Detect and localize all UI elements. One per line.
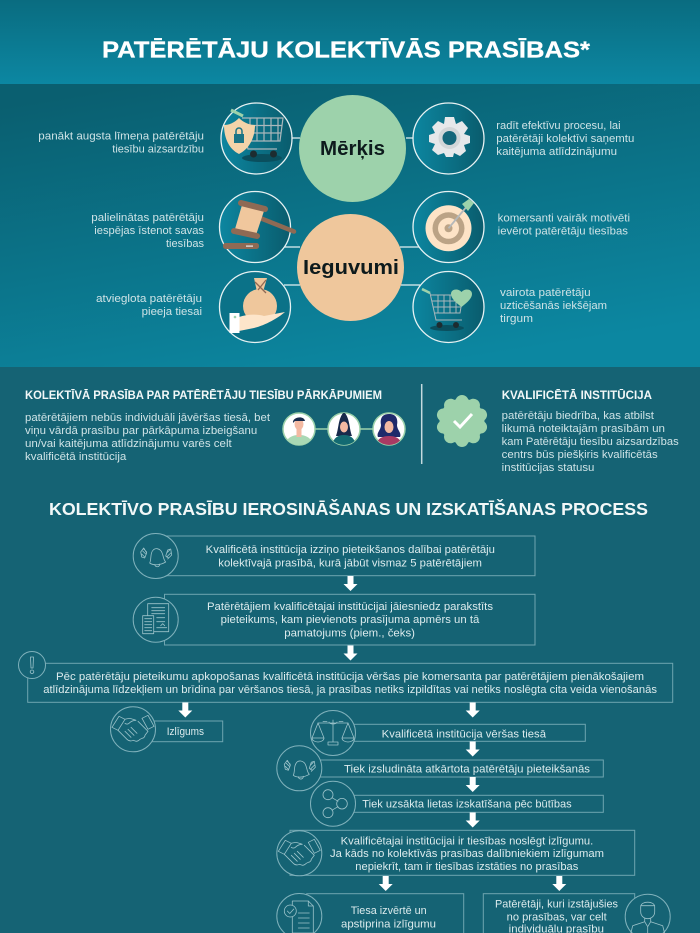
step 2: pieteikums, kam pievienots prasījuma apmērs un tā bbox=[221, 614, 480, 626]
text: benefit trust: uzticēšanās iekšējam bbox=[500, 300, 607, 312]
step: court approves: apstiprina izlīgumu bbox=[341, 918, 436, 930]
icon: cart with heart bbox=[413, 272, 484, 342]
circle: Ieguvumi: Ieguvumi bbox=[303, 256, 399, 279]
text: benefit rights: tiesības bbox=[166, 238, 204, 250]
arrow bbox=[344, 646, 358, 660]
text: left goal: panākt augsta līmeņa patērētāju bbox=[38, 130, 204, 142]
text: right goal: kaitējuma atlīdzinājumu bbox=[496, 146, 617, 158]
heading: KVALIFICĒTĀ INSTITŪCIJA bbox=[502, 389, 653, 402]
step: individual claim: no prasības, var celt bbox=[507, 911, 607, 923]
step: merits: Tiek uzsākta lietas izskatīšana pēc būtības bbox=[362, 799, 572, 811]
circle: Mērķis bbox=[299, 95, 406, 202]
title: PATĒRĒTĀJU KOLEKTĪVĀS PRASĪBAS* bbox=[102, 36, 590, 62]
arrow bbox=[466, 702, 480, 718]
step: repeat application bbox=[277, 746, 603, 791]
arrow bbox=[466, 742, 480, 756]
circle: Mērķis: Mērķis bbox=[320, 137, 385, 160]
step: court approves: Tiesa izvērtē un bbox=[351, 905, 427, 917]
panel: collective claim bbox=[25, 389, 405, 463]
step: settlement: Izlīgums bbox=[167, 726, 204, 738]
step 3: Pēc patērētāju pieteikumu apkopošanas kvalificētā institūcija vēršas pie komersanta par patērētājiem pienākošajiem bbox=[56, 671, 644, 683]
step 3: atlīdzinājuma līdzekļiem un brīdina par vēršanos tiesā, ja prasības netiks izpildītas vai netiks noslēgta cita veida vienošanās bbox=[43, 684, 658, 696]
description: centrs būs piešķiris kvalificētās bbox=[502, 449, 658, 461]
step 1 bbox=[133, 534, 535, 578]
step: settlement right: Kvalificētajai institūcijai ir tiesības noslēgt izlīgumu. bbox=[341, 835, 593, 847]
arrow bbox=[178, 702, 192, 718]
description: kam Patērētāju tiesību aizsardzības bbox=[502, 436, 679, 448]
step: settlement right: nepiekrīt, tam ir tiesības izstāties no prasības bbox=[355, 861, 579, 873]
arrow bbox=[379, 876, 393, 891]
icon: target bbox=[413, 192, 484, 262]
step 2: Patērētājiem kvalificētajai institūcijai jāiesniedz parakstīts bbox=[207, 601, 494, 613]
text: benefit rights: iespējas īstenot savas bbox=[94, 225, 204, 237]
step: court approves bbox=[277, 894, 464, 933]
icon: check badge bbox=[435, 395, 489, 447]
divider bbox=[421, 384, 423, 464]
step 2: pamatojums (piem., čeks) bbox=[284, 628, 415, 640]
arrow bbox=[466, 777, 480, 792]
text: benefit rights: palielinātas patērētāju bbox=[91, 212, 204, 224]
text: benefit motivated traders: komersanti vairāk motivēti bbox=[498, 213, 630, 225]
text: benefit trust bbox=[500, 287, 607, 325]
arrow bbox=[552, 876, 566, 891]
icon: gavel bbox=[220, 192, 294, 262]
step: settlement right: Ja kāds no kolektīvās prasības dalībniekiem izlīgumam bbox=[330, 848, 604, 860]
panel: qualified institution bbox=[435, 389, 679, 474]
text: benefit access: pieeja tiesai bbox=[142, 306, 202, 318]
icon: gear bbox=[413, 103, 484, 174]
text: right goal: patērētāji kolektīvi saņemtu bbox=[496, 133, 634, 145]
header band bbox=[0, 0, 700, 84]
description bbox=[502, 410, 679, 474]
icon: money bag in hand bbox=[220, 272, 290, 342]
description: viņu vārdā prasību par pārkāpuma izbeigšanu bbox=[25, 425, 257, 437]
text: benefit rights bbox=[91, 212, 204, 250]
text: benefit motivated traders: ievērot patērētāju tiesības bbox=[498, 226, 629, 238]
text: left goal bbox=[38, 130, 204, 155]
description: kvalificētā institūcija bbox=[25, 451, 127, 463]
step: merits bbox=[310, 781, 603, 826]
description: un/vai kaitējuma atlīdzinājumu varēs celt bbox=[25, 438, 232, 450]
step: settlement bbox=[110, 707, 223, 752]
process heading: KOLEKTĪVO PRASĪBU IEROSINĀŠANAS UN IZSKATĪŠANAS PROCESS bbox=[49, 498, 648, 519]
step 1: kolektīvajā prasībā, kurā jābūt vismaz 5 patērētājiem bbox=[218, 558, 482, 570]
text: benefit access: atvieglota patērētāju bbox=[96, 293, 202, 305]
text: right goal: radīt efektīvu procesu, lai bbox=[496, 120, 621, 132]
flowchart: process bbox=[18, 534, 673, 933]
description: likumā noteiktajām prasībām un bbox=[502, 423, 665, 435]
step: individual claim: Patērētāji, kuri izstājušies bbox=[495, 898, 618, 910]
arrow bbox=[344, 576, 358, 591]
text: benefit access bbox=[96, 293, 202, 318]
step 1: Kvalificētā institūcija izziņo pieteikšanos dalībai patērētāju bbox=[206, 544, 495, 556]
description: patērētājiem nebūs individuāli jāvēršas tiesā, bet bbox=[25, 412, 270, 424]
step 2 bbox=[133, 594, 535, 645]
description bbox=[25, 412, 270, 463]
step: repeat application: Tiek izsludināta atkārtota patērētāju pieteikšanās bbox=[344, 764, 591, 776]
text: benefit motivated traders bbox=[498, 213, 630, 238]
text: right goal bbox=[496, 120, 634, 158]
step: individual claim bbox=[483, 894, 670, 933]
text: benefit trust: vairota patērētāju bbox=[500, 287, 591, 299]
step 3 bbox=[18, 652, 673, 702]
step: settlement right bbox=[277, 830, 635, 876]
icon: cart with shield bbox=[221, 103, 292, 174]
heading: KOLEKTĪVĀ PRASĪBA PAR PATĒRĒTĀJU TIESĪBU PĀRKĀPUMIEM bbox=[25, 389, 382, 402]
text: benefit trust: tirgum bbox=[500, 313, 533, 325]
description: patērētāju biedrība, kas atbilst bbox=[502, 410, 654, 422]
text: left goal: tiesību aizsardzību bbox=[112, 143, 204, 155]
icon: three people bbox=[283, 412, 405, 446]
arrow bbox=[466, 812, 480, 828]
description: institūcijas statusu bbox=[502, 462, 594, 474]
circle: Ieguvumi bbox=[297, 214, 404, 321]
step: court: Kvalificētā institūcija vēršas tiesā bbox=[382, 728, 547, 740]
panel: goals and benefits bbox=[0, 84, 700, 367]
step: court bbox=[310, 710, 585, 756]
